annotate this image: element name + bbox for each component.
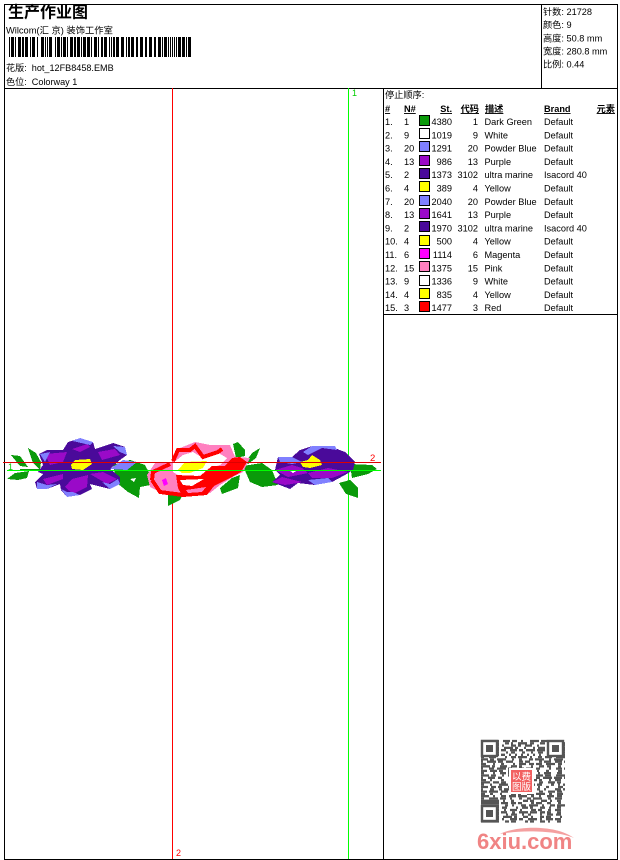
middle flower <box>147 442 250 497</box>
row 5: 1373 <box>432 170 452 180</box>
row 10: Yellow <box>484 237 511 247</box>
stop sequence heading: 停止顺序: <box>385 89 424 100</box>
stop sequence table header: 元素 <box>597 103 615 114</box>
row 13: White <box>484 277 508 287</box>
row 1: Default <box>544 117 574 127</box>
row 3: Powder Blue <box>484 144 537 154</box>
row 15: Default <box>544 303 574 313</box>
row 15: Red <box>484 303 501 313</box>
row 12: 15 <box>404 263 414 273</box>
row 3: 20 <box>404 144 414 154</box>
row 8: 8. <box>385 210 393 220</box>
row 10: 4 <box>404 237 409 247</box>
row 6: 389 <box>437 184 452 194</box>
row 3 <box>385 142 574 154</box>
row 15 <box>385 302 574 313</box>
guide lines <box>172 88 348 859</box>
design statistics: 比例: 0.44 <box>543 58 584 70</box>
row 6: 6. <box>385 184 393 194</box>
row 1: 1. <box>385 117 393 127</box>
row 6: 4 <box>473 184 478 194</box>
row 14: 835 <box>437 290 452 300</box>
row 15: 1477 <box>432 303 452 313</box>
row 3: 20 <box>468 144 478 154</box>
row 8: Purple <box>484 210 511 220</box>
design statistics: 针数: 21728 <box>543 6 592 17</box>
row 4: 986 <box>437 157 452 167</box>
row 1: Dark Green <box>484 117 532 127</box>
row 11: 1114 <box>433 250 452 260</box>
design statistics <box>543 6 608 70</box>
row 5 <box>385 168 587 180</box>
row 6: 4 <box>404 184 409 194</box>
row 5: 3102 <box>458 170 478 180</box>
row 2: White <box>484 130 508 140</box>
row 1: 4380 <box>432 117 452 127</box>
row 4: 13 <box>404 157 414 167</box>
embroidery design <box>7 438 377 506</box>
row 13: 1336 <box>432 277 452 287</box>
row 10: 10. <box>385 237 398 247</box>
row 3: 1291 <box>432 144 452 154</box>
row 14: 4 <box>404 290 409 300</box>
row 14: Yellow <box>484 290 511 300</box>
QR centre stamp <box>509 768 534 794</box>
QR code <box>481 741 565 822</box>
row 9: 1970 <box>432 223 452 233</box>
leaves <box>7 442 377 506</box>
row 9: 3102 <box>458 223 478 233</box>
guide label: red 2 bottom: 2 <box>176 848 181 858</box>
row 7: Powder Blue <box>484 197 537 207</box>
barcode <box>9 37 191 57</box>
row 2: 2. <box>385 130 393 140</box>
design statistics: 高度: 50.8 mm <box>543 32 603 44</box>
row 1 <box>385 116 574 127</box>
row 11: Default <box>544 250 574 260</box>
row 12: 12. <box>385 263 398 273</box>
row 8: 1641 <box>432 210 452 220</box>
company name: Wilcom(汇 京) 装饰工作室 <box>6 24 113 36</box>
row 14: 4 <box>473 290 478 300</box>
row 13: 9 <box>404 277 409 287</box>
right flower <box>272 446 355 489</box>
row 2: 9 <box>473 130 478 140</box>
stop sequence table header: 代码 <box>461 103 479 114</box>
row 7: 7. <box>385 197 393 207</box>
row 9: Isacord 40 <box>544 223 587 233</box>
row 14: Default <box>544 290 574 300</box>
row 9: 2 <box>404 223 409 233</box>
row 13 <box>385 276 574 287</box>
row 14 <box>385 288 574 300</box>
row 10: Default <box>544 237 574 247</box>
row 4 <box>385 156 574 167</box>
row 5: 5. <box>385 170 393 180</box>
row 12: 1375 <box>432 263 452 273</box>
row 10: 500 <box>437 237 452 247</box>
row 11: 6 <box>404 250 409 260</box>
row 15: 3 <box>404 303 409 313</box>
row 8: 13 <box>404 210 414 220</box>
row 7: 20 <box>468 197 478 207</box>
stop sequence table header: 描述 <box>485 103 503 114</box>
row 11: Magenta <box>484 250 521 260</box>
row 1: 1 <box>473 117 478 127</box>
row 7 <box>385 196 574 207</box>
row 12: Pink <box>484 263 503 273</box>
row 9 <box>385 222 587 233</box>
row 8 <box>385 208 574 220</box>
watermark: 6xiu.com: 6xiu.com <box>477 829 572 854</box>
row 15: 15. <box>385 303 398 313</box>
row 6 <box>385 182 574 194</box>
stop sequence table header: St. <box>440 104 452 114</box>
stop sequence table header: # <box>385 104 390 114</box>
row 11 <box>385 248 574 260</box>
row 7: 20 <box>404 197 414 207</box>
QR centre stamp: 以费 <box>512 771 531 783</box>
stop sequence table header: Brand <box>544 104 571 114</box>
row 4: 13 <box>468 157 478 167</box>
QR centre stamp: 图版 <box>512 781 532 793</box>
row 6: Yellow <box>484 184 511 194</box>
stop sequence table header: N# <box>404 104 416 114</box>
stop sequence table header <box>385 103 615 114</box>
row 12: Default <box>544 263 574 273</box>
left flower <box>35 438 137 497</box>
design statistics: 宽度: 280.8 mm <box>543 46 608 56</box>
row 10: 4 <box>473 237 478 247</box>
row 2: 1019 <box>432 130 452 140</box>
row 8: Default <box>544 210 574 220</box>
row 5: 2 <box>404 170 409 180</box>
row 7: Default <box>544 197 574 207</box>
colorway: 色位: Colorway 1 <box>6 76 77 87</box>
row 9: ultra marine <box>484 223 533 233</box>
row 3: 3. <box>385 144 393 154</box>
row 13: Default <box>544 277 574 287</box>
row 14: 14. <box>385 290 398 300</box>
row 5: ultra marine <box>484 170 533 180</box>
row 5: Isacord 40 <box>544 170 587 180</box>
row 15: 3 <box>473 303 478 313</box>
pattern file name: 花版: hot_12FB8458.EMB <box>6 62 114 73</box>
guide label: red 2 right: 2 <box>370 453 375 464</box>
row 13: 13. <box>385 277 398 287</box>
row 8: 13 <box>468 210 478 220</box>
row 11: 11. <box>385 250 397 260</box>
row 3: Default <box>544 144 574 154</box>
row 6: Default <box>544 184 574 194</box>
design statistics: 颜色: 9 <box>543 19 572 30</box>
guide label: green 1 left: 1 <box>8 462 13 472</box>
row 10 <box>385 236 574 247</box>
row 4: Default <box>544 157 574 167</box>
row 2: Default <box>544 130 574 140</box>
row 12: 15 <box>468 263 478 273</box>
horizontal guide lines <box>3 462 381 470</box>
row 4: Purple <box>484 157 511 167</box>
row 12 <box>385 262 574 273</box>
row 2 <box>385 128 574 140</box>
row 13: 9 <box>473 277 478 287</box>
row 11: 6 <box>473 250 478 260</box>
row 9: 9. <box>385 223 393 233</box>
guide label: green 1 top: 1 <box>352 88 357 98</box>
row 7: 2040 <box>432 197 452 207</box>
QR finder patterns <box>482 741 563 821</box>
row 2: 9 <box>404 130 409 140</box>
stop sequence table rows <box>385 116 587 313</box>
title: 生产作业图 <box>8 4 88 22</box>
row 4: 4. <box>385 157 393 167</box>
row 1: 1 <box>404 117 409 127</box>
